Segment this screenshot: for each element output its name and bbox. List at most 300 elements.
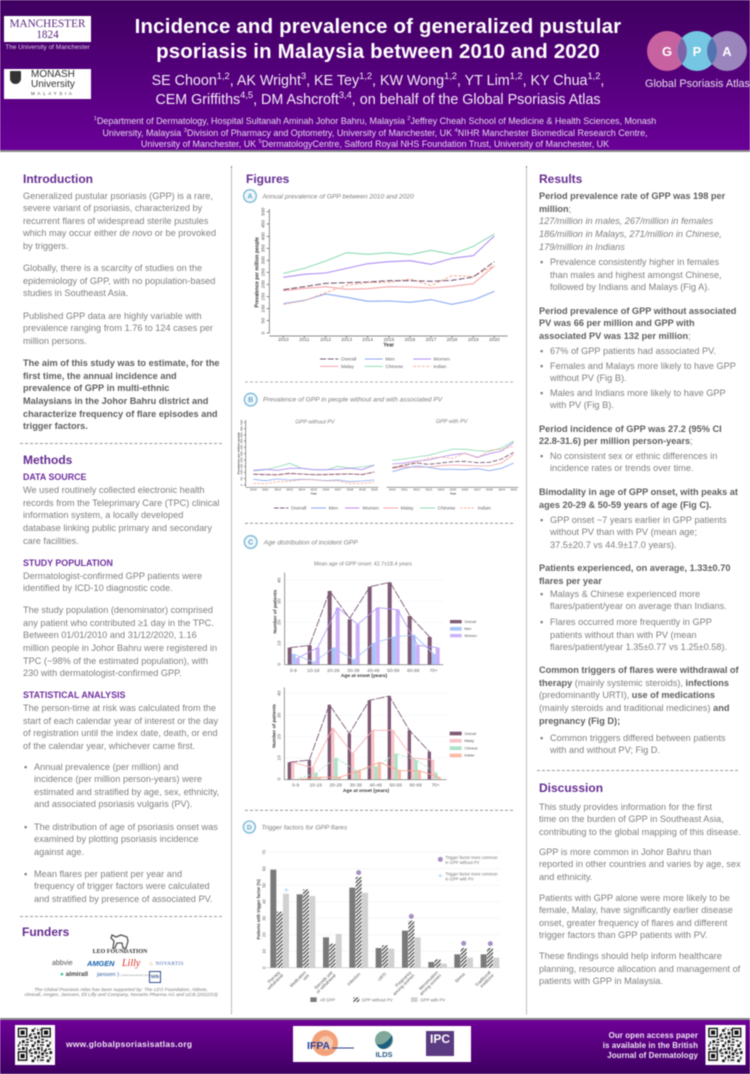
figure A: annual prevalence line chart: 400 [261, 232, 267, 240]
finding: flares per year [538, 563, 731, 587]
figure B: prevalence with and without PV: 100 [240, 470, 244, 475]
figure B: prevalence with and without PV [236, 392, 519, 524]
logo: Global Psoriasis Atlas: A [722, 44, 732, 59]
subheading: study population: STUDY POPULATION [23, 558, 113, 568]
figure A: annual prevalence line chart: 200 [261, 280, 267, 288]
finding: common triggers: Common triggers of flares were withdrawal of [539, 665, 739, 675]
bullet: flares by PV [539, 616, 727, 654]
subheading: data source: DATA SOURCE [23, 472, 86, 482]
text: burden: contributing to the global mapping of this disease. [539, 827, 741, 837]
figure A: annual prevalence line chart: 2018 [447, 337, 458, 343]
logo: IFPA [307, 1029, 355, 1059]
logo: IPC: IPC [430, 1032, 450, 1046]
figure C: age distribution of incident GPP: 0 [277, 663, 283, 666]
figure C: age distribution of incident GPP: Overall [464, 732, 476, 736]
figure D: trigger factors bar chart: withdrawal [266, 973, 284, 991]
text: more common: and ethnicity. [539, 872, 592, 882]
figure B: prevalence with and without PV: 2019 [498, 488, 505, 492]
text: definition: recurrent flares of widespread sterile pustules [23, 216, 208, 226]
bullet: prevalence by group: than males and highest amongst Chinese, [550, 270, 722, 280]
finding: bimodality [538, 487, 738, 511]
finding: flares per year: Patients experienced, on average, 1.33±0.70 [539, 563, 730, 573]
figure B: prevalence with and without PV: 2016 [462, 488, 469, 492]
title: psoriasis in Malaysia between 2010 and 2020 [156, 41, 600, 63]
bullet: annual prevalence: Annual prevalence (per million) and [34, 762, 179, 772]
figure B: prevalence with and without PV: Overall [291, 506, 306, 512]
figure A: annual prevalence line chart: 0 [261, 331, 267, 334]
figure D: trigger factors bar chart: 60 [261, 866, 266, 871]
figure B: prevalence with and without PV: 2018 [486, 488, 493, 492]
figure C: age distribution of incident GPP: Age distribution of incident GPP [263, 539, 358, 546]
text: data source [22, 485, 220, 546]
figure A: annual prevalence line chart: Overall [341, 357, 356, 363]
finding: flares per year: flares per year [539, 576, 602, 586]
finding: with and without PV: PV was 66 per million and GPP with [539, 318, 695, 328]
affiliations: University of Manchester, UK 5DermatologyCentre, Salford Royal NHS Foundation Trust, University of Manchester, UK [141, 139, 609, 149]
bullet: earlier onset: ▪ [540, 514, 543, 524]
figure C: age distribution of incident GPP: 40 [277, 577, 283, 583]
logo: IFPA: IFPA [307, 1040, 331, 1052]
figure C: age distribution of incident GPP: 10 [276, 755, 282, 761]
figure B: prevalence with and without PV: 400 [240, 432, 244, 438]
bullet: annual prevalence: incidence (per million person-years) were [34, 774, 202, 784]
text: aim: trigger factors. [23, 421, 88, 431]
logo: University of Manchester: MANCHESTER [10, 18, 85, 30]
text: open access paper: Journal of Dermatology [607, 1051, 698, 1060]
text: denominator: Between 01/01/2010 and 31/12/2020, 1.16 [23, 630, 197, 640]
figure B: prevalence with and without PV: Year [310, 491, 318, 495]
logo: Almirall: ● almirall [60, 971, 88, 978]
text: open access paper: Our open access paper [609, 1031, 698, 1040]
bullet: females and Malays: ▪ [540, 360, 543, 370]
figure C: age distribution of incident GPP: Malay [464, 739, 474, 743]
figure C: age distribution of incident GPP: Men [464, 627, 471, 631]
figure B: prevalence with and without PV: B [248, 397, 253, 404]
figure B: prevalence with and without PV: Year [450, 491, 457, 495]
text: scarcity: Globally, there is a scarcity of studies on the [23, 263, 202, 273]
figure C: age distribution of incident GPP: 40-49 [367, 668, 380, 674]
text: aim [22, 358, 220, 432]
panel: results [538, 172, 740, 756]
bullet: flares by PV: flares/patient/year 1.35±0.77 vs 1.25±0.58). [550, 642, 727, 652]
figure B: prevalence with and without PV: Chinese [438, 506, 456, 512]
text: denominator [22, 605, 218, 679]
finding: with and without PV: associated PV was 132 per million; [539, 331, 691, 341]
figure C: age distribution of incident GPP: Number of patients [272, 589, 278, 634]
figure C: age distribution of incident GPP: 20 [276, 734, 282, 739]
figure C: age distribution of incident GPP: 10 [277, 640, 283, 646]
figure B: prevalence with and without PV: Prevalence of GPP in people without and with associated PV [263, 397, 443, 404]
text: aim: The aim of this study was to estimate, for the [23, 358, 220, 368]
figure D: trigger factors bar chart: Traditional [474, 970, 492, 988]
figure B: prevalence with and without PV: 200 [240, 457, 244, 463]
figure B: prevalence with and without PV: 2010 [250, 488, 257, 492]
figure A: annual prevalence line chart: Women [433, 357, 450, 363]
figure B: prevalence with and without PV: 2011 [262, 488, 269, 492]
heading: introduction: Introduction [23, 172, 93, 186]
figure B: prevalence with and without PV: 2015 [310, 488, 317, 492]
bullet: mean flares: ▪ [24, 868, 27, 878]
figure B: prevalence with and without PV: 2020 [371, 488, 378, 492]
figure D: trigger factors bar chart: Infection [346, 971, 362, 987]
logo: Lilly: Lilly [122, 958, 140, 969]
bullet: females and Malays: without PV (Fig B). [550, 373, 627, 383]
figure B: prevalence with and without PV: 2012 [274, 488, 281, 492]
figure C: age distribution of incident GPP: Overall [464, 620, 476, 624]
figure B: prevalence with and without PV: Indian [478, 506, 491, 512]
finding: period prevalence: Period prevalence rate of GPP was 198 per [539, 191, 725, 201]
figure A: annual prevalence line chart: 150 [261, 292, 267, 301]
text: open access paper [540, 1031, 698, 1061]
figure C: age distribution of incident GPP: 0-9 [290, 668, 297, 674]
figure D: trigger factors bar chart: URTI [377, 971, 387, 982]
figure A: annual prevalence line chart: Indian [433, 364, 447, 370]
figure B: prevalence with and without PV: 2011 [401, 488, 408, 492]
figure D: trigger factors bar chart: D [247, 824, 252, 831]
figure A: annual prevalence line chart: 2010 [278, 337, 289, 343]
figure C: age distribution of incident GPP: 20-29 [327, 668, 340, 674]
figure C: age distribution of incident GPP: 10-19 [307, 668, 320, 674]
figure A: annual prevalence line chart: 250 [261, 268, 267, 276]
figure C: age distribution of incident GPP: 70+ [432, 783, 440, 789]
title: Incidence and prevalence of generalized pustular [135, 16, 621, 38]
figure D: trigger factors bar chart: among women [392, 972, 416, 997]
bullet: triggers differ [539, 732, 726, 757]
bullet: males and Indians: ▪ [540, 388, 543, 398]
figure B: prevalence with and without PV: GPP without PV [295, 419, 336, 425]
figure C: age distribution of incident GPP [243, 534, 478, 794]
text: GPP alone: female, Malay, have significantly earlier disease [539, 905, 733, 915]
finding: with and without PV [538, 306, 736, 342]
text: published data: million persons. [23, 336, 87, 346]
text: implications: patients with GPP in Malaysia. [539, 976, 663, 986]
bullet: triggers differ: ▪ [540, 732, 543, 742]
figure D: trigger factors bar chart: use [302, 972, 311, 981]
text: more common: GPP is more common in Johor Bahru than [539, 846, 711, 856]
bullet: associated PV: ▪ [540, 346, 543, 356]
figure D: trigger factors bar chart: Medication [289, 969, 307, 988]
text: burden [539, 800, 741, 838]
figure A: annual prevalence line chart: 450 [261, 220, 267, 228]
figure C: age distribution of incident GPP: 0-9 [292, 783, 299, 789]
figure D: trigger factors bar chart: or withdrawal [315, 973, 337, 994]
QR code: paper [705, 1025, 746, 1065]
figure A: annual prevalence line chart: Prevalence per million people [255, 237, 261, 308]
bullet: age distribution: examined by plotting psoriasis incidence [34, 834, 198, 844]
text: scarcity [22, 263, 216, 298]
figure D: trigger factors bar chart: All GPP [320, 997, 335, 1002]
finding: bimodality: Bimodality in age of GPP onset, with peaks at [539, 487, 738, 497]
panel: funders [22, 925, 218, 998]
figure C: age distribution of incident GPP: 20-29 [329, 783, 342, 789]
figure B: prevalence with and without PV: GPP with PV [436, 419, 469, 425]
text: denominator: million people in Johor Bahru were registered in [23, 643, 217, 653]
bullet: triggers differ: with and without PV; Fig D. [550, 745, 660, 755]
logo: Monash University Malaysia: MONASH [31, 69, 75, 80]
figure A: annual prevalence line chart: 2012 [320, 337, 331, 343]
text: more common: reported in other countries and varies by age, sex [539, 859, 741, 869]
figure D: trigger factors bar chart: Pregnancy [394, 969, 413, 988]
authors [152, 71, 604, 108]
bullet: annual prevalence: estimated and stratified by age, sex, ethnicity, [34, 787, 219, 797]
logo: UCB [149, 971, 161, 983]
text: data source: care facilities. [23, 536, 79, 546]
text: person-time: start of each calendar year of interest or the day [23, 716, 218, 726]
figure D: trigger factors bar chart: in GPP without PV [445, 860, 480, 865]
figure B: prevalence with and without PV: 2015 [450, 488, 457, 492]
figure C: age distribution of incident GPP: 30-39 [349, 783, 362, 789]
figure A: annual prevalence line chart: 2015 [384, 337, 395, 343]
bullet: annual prevalence: and associated psoriasis vulgaris (PV). [34, 799, 192, 809]
figure A: annual prevalence line chart: 500 [261, 207, 267, 216]
figure D: trigger factors bar chart: GPP with PV [420, 997, 445, 1002]
bullet: earlier onset: without PV than with PV (mean age; [550, 527, 697, 537]
figure B: prevalence with and without PV: 450 [240, 426, 244, 431]
figure D: trigger factors bar chart: 10 [261, 948, 266, 954]
figure A: annual prevalence line chart: 2016 [405, 337, 416, 343]
text: funding statement: Almirall, Amgen, Janssen, Eli Lilly and Company, Novartis Pharma AG and UCB (2022/23) [24, 993, 218, 998]
text: scarcity: epidemiology of GPP, with no population-based [23, 276, 215, 286]
text: implications [539, 950, 740, 988]
figure C: age distribution of incident GPP: 60-69 [407, 668, 420, 674]
bullet: age distribution: against age. [34, 847, 84, 857]
text: burden: This study provides information for the first [539, 802, 712, 812]
text: denominator: any patient who contributed ≥1 day in the TPC. [23, 618, 214, 628]
logo: Novartis: ♨ NOVARTIS [149, 961, 184, 967]
bullet: earlier onset: 37.5±20.7 vs 44.9±17.0 years). [550, 540, 677, 550]
bullet: flares by PV: patients without than with PV (mean [550, 630, 697, 640]
text: GPP alone: trigger factors than GPP patients with PV. [539, 930, 708, 940]
text: published data: prevalence ranging from 1.76 to 124 cases per [23, 323, 213, 333]
heading: discussion: Discussion [539, 781, 603, 795]
bullet: males and Indians [540, 388, 726, 411]
affiliations [94, 115, 656, 150]
text: case definition: Dermatologist-confirmed GPP patients were [23, 570, 202, 580]
logo: University of Manchester: 1824 [36, 29, 59, 41]
figure A: annual prevalence line chart: Men [385, 357, 395, 363]
figure D: trigger factors bar chart: Menstruation [418, 969, 439, 991]
logo: Monash University Malaysia: University [31, 78, 75, 90]
figure B: prevalence with and without PV: Malay [401, 506, 414, 512]
bullet: associated PV: 67% of GPP patients had associated PV. [550, 346, 716, 356]
authors: CEM Griffiths4,5, DM Ashcroft3,4, on behalf of the Global Psoriasis Atlas [155, 90, 601, 108]
text: burden: time on the burden of GPP in Southeast Asia, [539, 814, 724, 824]
text: data source: database linking public primary and secondary [23, 523, 212, 533]
affiliations: University, Malaysia 3Division of Pharmacy and Optometry, University of Manchester, UK 4NIHR Manchester Biomedical Research Centre, [102, 128, 648, 138]
figure B: prevalence with and without PV: 300 [240, 445, 244, 450]
bullet: males and Indians: Males and Indians more likely to have GPP [550, 388, 726, 398]
bullet: mean flares [24, 868, 212, 904]
text: aim: Malaysians in the Johor Bahru district and [23, 396, 208, 406]
figure C: age distribution of incident GPP: 20 [277, 619, 283, 625]
text: aim: characterize frequency of flare episodes and [23, 409, 218, 419]
figure C: age distribution of incident GPP: Number of patients [272, 704, 278, 748]
finding: period prevalence: 179/million in Indians [539, 242, 625, 252]
text: aim: first time, the annual incidence and [23, 371, 177, 381]
bullet: incidence differences: incidence rates or trends over time. [550, 463, 694, 473]
figure A: annual prevalence line chart: 350 [261, 244, 267, 252]
figure C: age distribution of incident GPP: C [248, 539, 253, 546]
bullet: earlier onset [540, 514, 727, 550]
figure B: prevalence with and without PV: 2017 [474, 488, 481, 492]
panel: methods [22, 453, 220, 904]
figure B: prevalence with and without PV: 2018 [347, 488, 354, 492]
figure B: prevalence with and without PV: 2020 [510, 488, 517, 492]
text: open access paper: is available in the British [603, 1041, 698, 1050]
figure B: prevalence with and without PV: 2014 [298, 488, 305, 492]
bullet: mean flares: Mean flares per patient per year and [34, 868, 182, 878]
figure A: annual prevalence line chart: 300 [261, 256, 267, 264]
finding: period incidence [538, 424, 722, 447]
figure B: prevalence with and without PV: 50 [240, 477, 244, 480]
logo: University of Manchester: The University of Manchester [5, 44, 90, 51]
finding: period prevalence: 127/million in males, 267/million in females [539, 216, 713, 226]
finding: period prevalence: million; [539, 204, 571, 214]
bullet: age distribution: The distribution of age of psoriasis onset was [34, 822, 218, 832]
figure D: trigger factors bar chart: 50 [261, 882, 266, 888]
header band [0, 0, 750, 152]
figure A: annual prevalence line chart: Malay [341, 364, 354, 370]
figure C: age distribution of incident GPP: 60-69 [409, 783, 422, 789]
bullet: flares by PV: ▪ [540, 617, 543, 627]
text: data source: records from the Teleprimary Care (TPC) clinical [23, 498, 219, 508]
finding: common triggers: (predominantly URTI), use of medications [539, 690, 715, 700]
figure A: annual prevalence line chart: Annual prevalence of GPP between 2010 and 2020 [261, 193, 414, 200]
figure D: trigger factors bar chart [242, 809, 514, 1003]
figure A: annual prevalence line chart: Chinese [385, 364, 403, 370]
figure B: prevalence with and without PV: 2012 [413, 488, 420, 492]
text: person-time: of the calendar year, whichever came first. [23, 741, 195, 751]
finding: common triggers: pregnancy (Fig D); [539, 716, 620, 726]
column divider right [526, 166, 527, 1014]
logo: Monash University Malaysia [4, 69, 91, 99]
figure B: prevalence with and without PV: 150 [240, 464, 244, 469]
figure B: prevalence with and without PV: 500 [240, 420, 244, 425]
text: data source: information system, a locally developed [23, 510, 183, 520]
figure A: annual prevalence line chart: 2019 [468, 337, 479, 343]
text: more common [539, 846, 741, 883]
logo: University of Manchester [3, 15, 92, 52]
figure B: prevalence with and without PV: 350 [240, 438, 244, 444]
bullet: flares by ethnicity: flares/patient/year on average than Indians. [550, 601, 727, 611]
logo: IPC [426, 1031, 454, 1056]
bullet: females and Malays [540, 360, 736, 384]
figure D: trigger factors bar chart: 30 [261, 915, 266, 921]
finding: period incidence: Period incidence of GPP was 27.2 (95% CI [539, 424, 722, 434]
figure A: annual prevalence line chart: 2017 [426, 337, 437, 343]
figure B: prevalence with and without PV: Women [362, 506, 379, 512]
figure B: prevalence with and without PV: Prevalence per million people [237, 432, 241, 475]
logo: Global Psoriasis Atlas: G [662, 44, 672, 59]
text: aim: prevalence of GPP in multi-ethnic [23, 383, 169, 393]
bullet: incidence differences: No consistent sex or ethnic differences in [550, 450, 717, 460]
heading: methods: Methods [23, 453, 72, 467]
bullet: mean flares: and stratified by presence of associated PV. [34, 894, 212, 904]
text: case definition [23, 570, 202, 594]
affiliations: 1Department of Dermatology, Hospital Sultanah Aminah Johor Bahru, Malaysia 2Jeffrey Cheah School of Medicine & Health Sciences, Monash [94, 116, 656, 126]
figure D: trigger factors bar chart: Steroids use [313, 969, 334, 990]
figure D: trigger factors bar chart: medicine [479, 972, 495, 989]
bullet: flares by ethnicity: Malays & Chinese experienced more [550, 588, 700, 598]
bullet: prevalence by group: followed by Indians and Malays (Fig A). [550, 282, 710, 292]
figure D: trigger factors bar chart: in GPP with PV [445, 877, 474, 882]
panel: introduction [22, 172, 220, 432]
bullet: males and Indians: with PV (Fig B). [550, 400, 614, 410]
figure D: trigger factors bar chart: 40 [261, 899, 266, 904]
figure A: annual prevalence line chart: Year [383, 343, 394, 349]
bullet: annual prevalence [24, 762, 219, 810]
authors: SE Choon1,2, AK Wright3, KE Tey1,2, KW Wong1,2, YT Lim1,2, KY Chua1,2, [152, 71, 604, 89]
figure C: age distribution of incident GPP: 0 [276, 777, 282, 780]
figure C: age distribution of incident GPP: 50-59 [387, 668, 400, 674]
finding: period prevalence: 186/million in Malays, 271/million in Chinese, [539, 229, 722, 239]
figure C: age distribution of incident GPP: Women [464, 634, 477, 638]
website link: www.globalpsoriasisatlas.org [66, 1039, 192, 1049]
heading: results: Results [539, 172, 582, 186]
figure C: age distribution of incident GPP: Indian [464, 754, 474, 758]
figure D: trigger factors bar chart: Trigger factor more common [445, 871, 498, 876]
text: scarcity: studies in Southeast Asia. [23, 288, 128, 298]
QR code: website [15, 1025, 55, 1065]
logo: Amgen: AMGEN [87, 959, 115, 968]
figure C: age distribution of incident GPP: Mean age of GPP onset: 42.7±18.4 years [314, 562, 412, 568]
figure B: prevalence with and without PV: 2017 [335, 488, 342, 492]
figure A: annual prevalence line chart: 2013 [341, 337, 352, 343]
finding: common triggers [539, 664, 739, 727]
partner logos [293, 1026, 471, 1062]
figure D: trigger factors bar chart: 20 [261, 932, 266, 937]
figure B: prevalence with and without PV: 2013 [286, 488, 293, 492]
figure B: prevalence with and without PV: Men [329, 506, 338, 512]
bullet: incidence differences [540, 450, 718, 473]
text: person-time: The person-time at risk was calculated from the [23, 703, 216, 713]
figure D: trigger factors bar chart: Trigger factor more common [445, 855, 498, 860]
logo: LEO Foundation: LEO FOUNDATION [93, 949, 147, 955]
finding: common triggers: therapy (mainly systemic steroids), infections [539, 678, 729, 688]
figure A: annual prevalence line chart: 2011 [299, 337, 310, 343]
text: funding statement: The Global Psoriasis Atlas has been supported by: The LEO Foundation, Abbvie, [34, 988, 208, 992]
figure D: trigger factors bar chart: Trigger factors for GPP flares [261, 824, 348, 831]
figure C: age distribution of incident GPP: 10-19 [309, 783, 322, 789]
figure B: prevalence with and without PV: 2019 [359, 488, 366, 492]
figure C: age distribution of incident GPP: 70+ [430, 668, 438, 674]
text: data source: We used routinely collected electronic health [23, 485, 205, 495]
heading: funders: Funders [22, 925, 69, 939]
figure A: annual prevalence line chart: 100 [261, 304, 267, 313]
figure C: age distribution of incident GPP: 30 [277, 598, 283, 604]
text: denominator: TPC (~98% of the estimated population), with [23, 656, 208, 666]
figure C: age distribution of incident GPP: 40-49 [369, 783, 382, 789]
bullet: flares by PV: Flares occurred more frequently in GPP [550, 617, 712, 627]
text: published data [23, 310, 214, 346]
bullet: incidence differences: ▪ [540, 450, 543, 460]
text: denominator: The study population (denominator) comprised [23, 605, 213, 615]
text: case definition: identified by ICD-10 diagnostic code. [23, 583, 173, 593]
figure C: age distribution of incident GPP: Chinese [464, 746, 478, 750]
bullet: prevalence by group: Prevalence consistently higher in females [550, 257, 719, 267]
logo: Global Psoriasis Atlas [644, 30, 750, 90]
text: GPP alone: onset, greater frequency of flares and different [539, 918, 727, 928]
figure B: prevalence with and without PV: 250 [240, 451, 244, 456]
bullet: prevalence by group: ▪ [540, 257, 543, 267]
logo: LEO Foundation [92, 934, 148, 955]
text: funding statement [24, 987, 218, 998]
subheading: statistical analysis: STATISTICAL ANALYSIS [23, 690, 125, 700]
finding: common triggers: (mainly steroids and traditional medicines) and [539, 703, 729, 713]
figure D: trigger factors bar chart: Therapy [266, 969, 282, 985]
text: person-time: of registration until the index date, death, or end [23, 728, 218, 738]
figure A: annual prevalence line chart: 2020 [489, 337, 500, 343]
